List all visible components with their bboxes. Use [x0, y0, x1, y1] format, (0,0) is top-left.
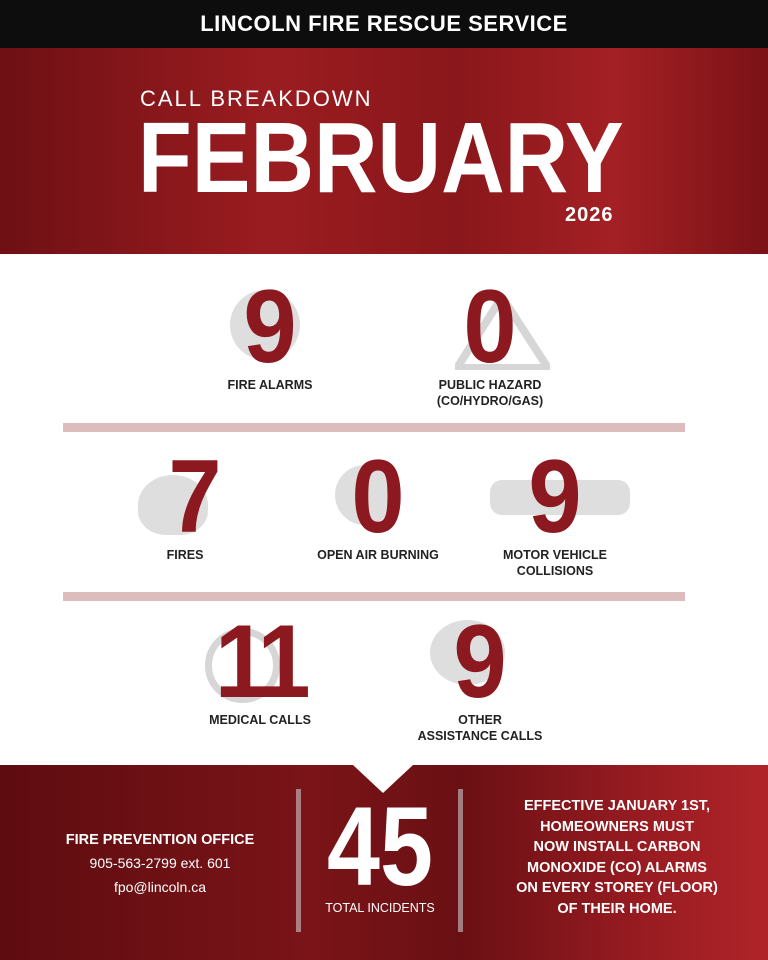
- stat: motor vehicle collisions: MOTOR VEHICLE: [503, 548, 607, 562]
- stat: public hazard: 0: [463, 269, 517, 385]
- contact info: fpo@lincoln.ca: [114, 879, 206, 895]
- icon: cars: [490, 480, 630, 515]
- stat: motor vehicle collisions: [490, 439, 630, 578]
- header bar: LINCOLN FIRE RESCUE SERVICE: [200, 11, 568, 36]
- month title: FEBRUARY: [138, 102, 624, 214]
- stat: medical calls: MEDICAL CALLS: [209, 713, 311, 727]
- CO alarm notice: EFFECTIVE JANUARY 1ST,: [524, 798, 710, 814]
- icon: flame: [335, 465, 395, 525]
- total label: TOTAL INCIDENTS: [325, 901, 435, 915]
- CO alarm notice: MONOXIDE (CO) ALARMS: [527, 860, 707, 876]
- icon: bell: [230, 290, 300, 360]
- CO alarm notice: [516, 798, 718, 916]
- stat: other assistance: [418, 604, 542, 743]
- contact info: [66, 832, 254, 895]
- stat: fires: [138, 439, 222, 562]
- icon: flame: [138, 475, 208, 535]
- stat: motor vehicle collisions: COLLISIONS: [517, 564, 593, 578]
- CO alarm notice: HOMEOWNERS MUST: [540, 818, 694, 834]
- hero banner: [0, 48, 768, 254]
- CO alarm notice: ON EVERY STOREY (FLOOR): [516, 880, 718, 896]
- contact info: 905-563-2799 ext. 601: [90, 855, 230, 871]
- stat: other assistance: OTHER: [458, 713, 502, 727]
- stat: open air burning: 0: [351, 439, 405, 555]
- stat: fires: FIRES: [167, 548, 203, 562]
- icon: medical cross circle: [205, 628, 280, 703]
- total number: 45: [327, 784, 433, 909]
- contact info: FIRE PREVENTION OFFICE: [66, 832, 254, 848]
- stat: fire alarms: [228, 269, 312, 392]
- pointer notch: [353, 765, 413, 793]
- subtitle: CALL BREAKDOWN: [140, 86, 373, 111]
- stat: fire alarms: 9: [243, 269, 297, 385]
- stat: open air burning: OPEN AIR BURNING: [317, 548, 439, 562]
- stat: fires: 7: [168, 439, 222, 555]
- stat: fire alarms: FIRE ALARMS: [228, 378, 312, 392]
- icon: phone: [430, 620, 505, 685]
- stat: other assistance: 9: [453, 604, 507, 720]
- icon: warning triangle: [455, 295, 550, 370]
- year: 2026: [565, 204, 614, 226]
- stat: public hazard: [437, 269, 550, 408]
- stat: medical calls: 11: [215, 604, 305, 720]
- stat: motor vehicle collisions: 9: [528, 439, 582, 555]
- CO alarm notice: NOW INSTALL CARBON: [533, 839, 700, 855]
- stat: public hazard: PUBLIC HAZARD: [439, 378, 541, 392]
- stat: other assistance: ASSISTANCE CALLS: [418, 729, 542, 743]
- CO alarm notice: OF THEIR HOME.: [557, 900, 677, 916]
- stat: public hazard: (CO/HYDRO/GAS): [437, 394, 543, 408]
- header bar: [0, 0, 768, 48]
- footer panel: [0, 765, 768, 960]
- stat: open air burning: [317, 439, 439, 562]
